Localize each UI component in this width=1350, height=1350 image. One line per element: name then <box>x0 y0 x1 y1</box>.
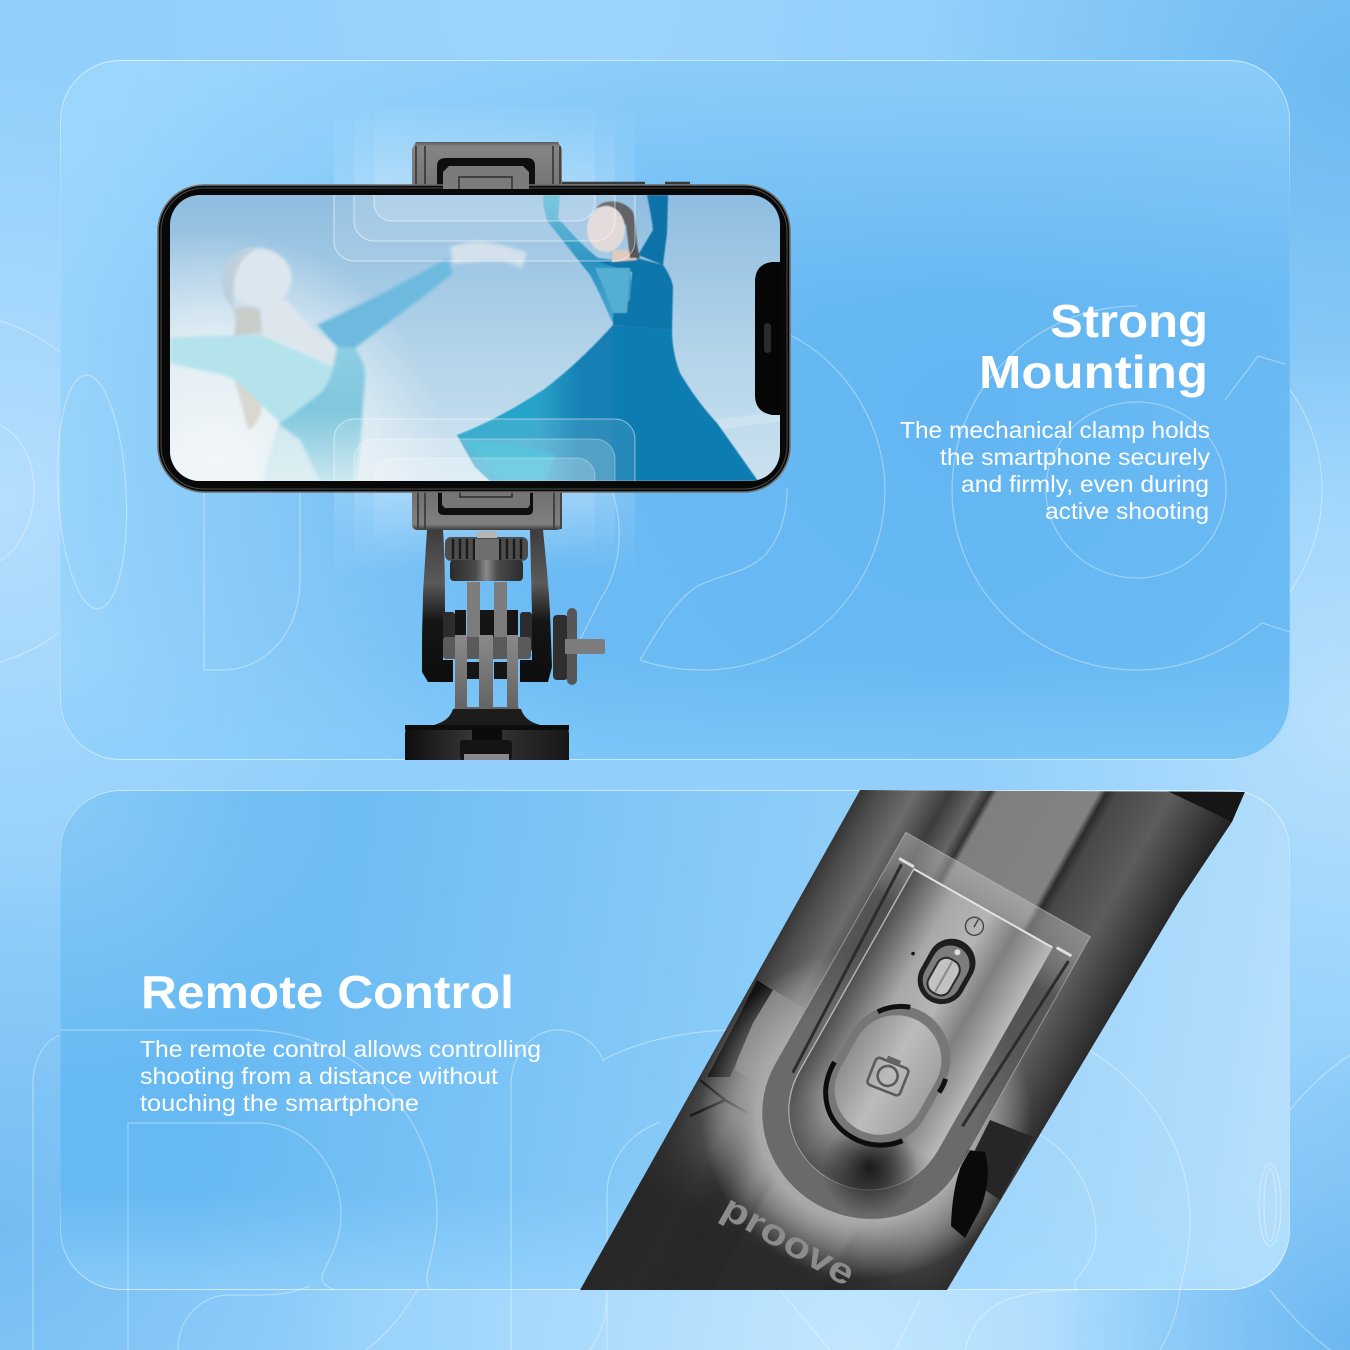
text: strong mounting description <box>900 417 1211 524</box>
phone <box>157 182 791 493</box>
text: strong mounting description: and firmly, even during <box>961 471 1209 497</box>
background brand letter outlines <box>0 306 1350 1350</box>
product: phone mount stand <box>405 142 605 760</box>
extended sleeve <box>317 258 453 348</box>
hand <box>450 242 527 268</box>
frame rim highlight <box>161 188 787 489</box>
right clip <box>951 1150 988 1238</box>
side rails <box>786 864 1069 1164</box>
phone side buttons <box>562 183 690 491</box>
clamp travel glow behind the stand: bottom <box>334 488 635 578</box>
skirt <box>457 325 758 481</box>
text: strong mounting description: the smartphone securely <box>940 444 1211 470</box>
text: remote control description: touching the smartphone <box>140 1090 419 1116</box>
text: strong mounting description: The mechanical clamp holds <box>900 417 1210 443</box>
knurled knob <box>445 531 528 581</box>
sheer sleeve raised <box>543 195 632 322</box>
right clip recess <box>975 1120 1033 1200</box>
indicator dot <box>911 951 915 956</box>
speaker <box>764 323 771 353</box>
bodice <box>598 258 673 330</box>
neck and chest <box>260 300 337 367</box>
lower left ledge <box>690 1080 748 1116</box>
panel: strong mounting <box>60 60 1290 760</box>
text: remote control description <box>140 1036 541 1116</box>
clamp travel glow behind the stand: top <box>334 100 635 190</box>
skirt hem <box>457 390 543 481</box>
rim glow <box>641 889 1091 1339</box>
base cylinder <box>405 725 569 760</box>
handle body <box>580 790 1245 1339</box>
text: remote control description: shooting from a distance without <box>140 1063 499 1089</box>
text: remote control description: The remote control allows controlling <box>140 1036 541 1062</box>
long hair <box>234 382 262 430</box>
upper clamp plate over phone edge <box>443 166 529 189</box>
text: strong mounting description: active shooting <box>1045 498 1209 524</box>
heading: Remote Control: Remote Control <box>141 966 514 1018</box>
phone frame <box>158 185 790 492</box>
product: remote control handle <box>580 790 1245 1339</box>
torso <box>265 346 367 481</box>
notch <box>755 262 782 415</box>
slide switch <box>909 930 984 1013</box>
foreground dancer <box>457 195 758 481</box>
icon: camera <box>866 1052 911 1096</box>
side button recess <box>707 980 773 1077</box>
lower clamp <box>412 492 562 530</box>
phone screen <box>170 195 780 481</box>
hair <box>222 248 255 306</box>
shutter button <box>806 986 970 1164</box>
glass halo <box>725 832 1090 1257</box>
heading: Strong Mounting: Mounting <box>979 346 1208 398</box>
sheer side panel <box>595 268 630 313</box>
swivel arms <box>422 530 552 682</box>
glass panels on screen: bottom <box>334 418 636 481</box>
logo text: proove <box>715 1186 862 1294</box>
heading: Strong Mounting <box>979 295 1208 398</box>
left side block <box>735 980 792 1074</box>
lower skirt fade <box>263 425 320 481</box>
ponytail <box>233 307 262 336</box>
hair <box>597 201 640 258</box>
panel: remote control <box>60 790 1290 1290</box>
top end cap <box>1168 792 1244 822</box>
ghost dancer <box>170 242 527 481</box>
opposite sleeve <box>638 195 668 265</box>
glass panels on screen: top <box>334 195 636 262</box>
head <box>233 246 293 306</box>
left sleeve highlight <box>170 335 333 423</box>
neck <box>612 250 637 262</box>
remote plate <box>761 869 1052 1218</box>
pivot joint <box>434 582 540 725</box>
heading: Strong Mounting: Strong <box>1050 295 1208 347</box>
icon: power symbol <box>962 914 987 939</box>
face <box>587 206 625 252</box>
side thumb screw <box>553 608 605 685</box>
upper clamp <box>412 142 562 186</box>
